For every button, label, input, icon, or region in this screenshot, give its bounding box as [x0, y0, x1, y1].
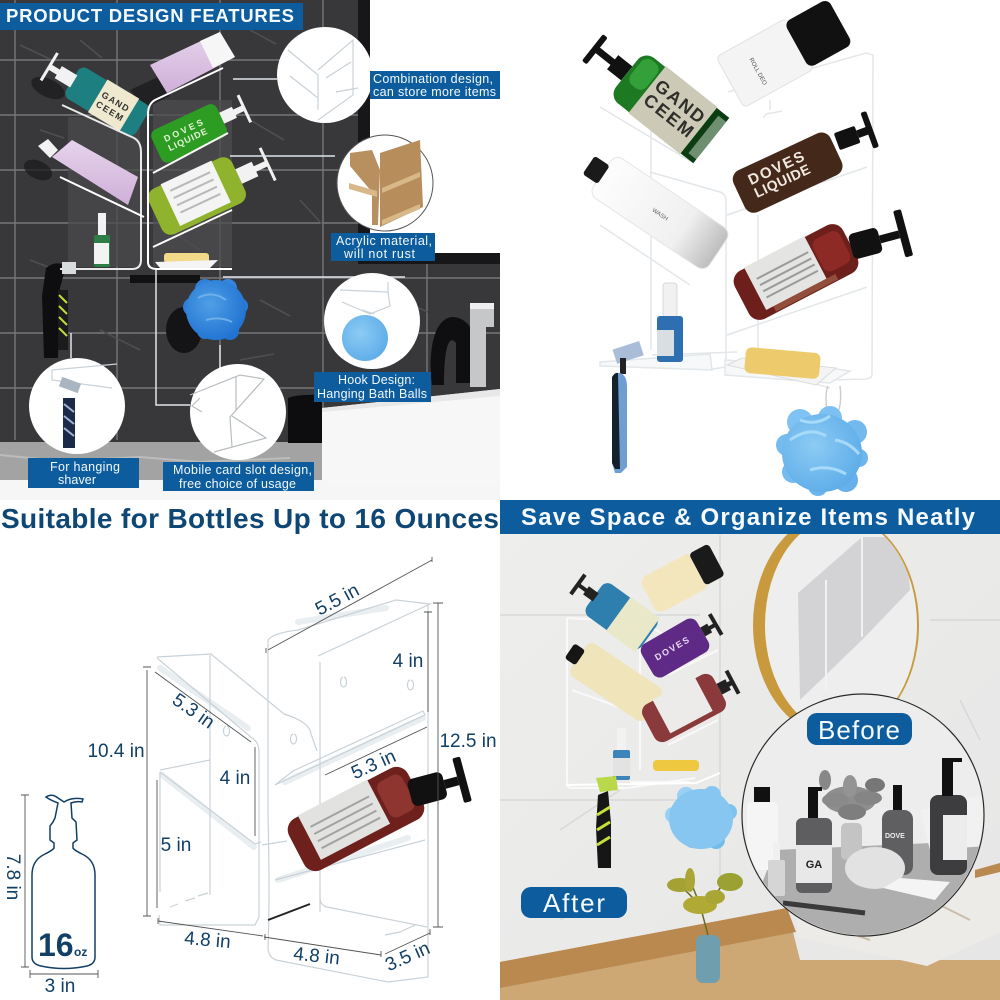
- bottle: teal soap: CEEM: [94, 99, 125, 123]
- bottle: white lower left: WASH: [651, 208, 669, 223]
- bottle: cream lower: [566, 643, 662, 721]
- header banner: Save Space & Organize Items Neatly: [521, 504, 976, 531]
- dimension labels: 5.5 in: [312, 580, 363, 620]
- callout circle: wood model: [337, 135, 433, 231]
- bottle on rack: [283, 761, 429, 876]
- dimension lines: [21, 557, 443, 978]
- white backdrop: [0, 500, 500, 1000]
- dove bottle: [882, 810, 913, 875]
- dimension labels: 10.4 in: [87, 741, 145, 762]
- label: for hanging shaver: For hanging: [50, 460, 120, 474]
- bottle: green soap: [151, 94, 252, 163]
- leader lines: [71, 79, 405, 405]
- label: for hanging shaver: shaver: [58, 473, 96, 487]
- small bottle, soap: [566, 728, 720, 785]
- callout circle: card slot: [190, 364, 286, 460]
- bottle: red la bruket: [729, 219, 863, 324]
- tiled dark wall: [0, 0, 500, 442]
- soap and dish: [155, 253, 218, 268]
- bottle: brown doves liquide: LIQUIDE: [751, 161, 813, 201]
- bottle: lilac upper: [150, 32, 235, 93]
- table top: [740, 840, 1000, 940]
- label: hook design: Hook Design:: [338, 373, 415, 387]
- bottle: red and white: [642, 670, 740, 742]
- acrylic rack outline: [157, 600, 430, 982]
- header banner: PRODUCT DESIGN FEATURES: [6, 5, 294, 26]
- bottle: lilac lower: [38, 139, 138, 205]
- bottle: teal soap: GAND: [100, 90, 131, 114]
- dimension labels: 4.8 in: [183, 928, 232, 953]
- acrylic frame: [600, 53, 873, 388]
- bottle: green gand ceem: GAND: [651, 76, 709, 127]
- bottle: white with black cap: ROLL DEO: [747, 57, 767, 87]
- panel: product on white: [500, 0, 1000, 500]
- dark bottle: [930, 795, 967, 875]
- bath pouf: [665, 786, 737, 849]
- label: mobile card slot: Mobile card slot design,: [173, 463, 312, 477]
- soap on dish: [727, 347, 836, 385]
- label: combination design: can store more items: [373, 85, 496, 99]
- callout circle: hook and pouf: [324, 273, 420, 369]
- label: combination design: [370, 71, 500, 99]
- dimension labels: 4 in: [220, 768, 250, 789]
- acrylic rack frame: [60, 68, 232, 269]
- bath pouf: [183, 279, 248, 340]
- razor: [58, 262, 76, 350]
- callout circle: combination design: [277, 27, 373, 123]
- bottle: teal: [569, 574, 660, 652]
- pump bottle with label: [796, 818, 832, 893]
- counter and sink: [0, 303, 500, 500]
- razor: [783, 903, 865, 913]
- dimension labels: [2, 580, 497, 997]
- dimension labels: 4.8 in: [292, 944, 341, 969]
- panel: before and after: [500, 500, 1000, 1000]
- mirror: [753, 534, 919, 718]
- bottle: green gand ceem: [574, 23, 730, 164]
- panel: dimensions: [0, 500, 500, 1000]
- label: hook design: [314, 372, 431, 402]
- small blue bottle: [657, 283, 683, 362]
- dimension labels: 3.5 in: [382, 938, 433, 976]
- label: acrylic material: Acrylic material,: [336, 234, 432, 248]
- dish: [883, 878, 950, 900]
- before circle scene: GA: [806, 859, 822, 871]
- vase and plant: [667, 868, 743, 983]
- dimension labels: 5.3 in: [348, 746, 399, 784]
- label: after: After: [543, 888, 605, 918]
- dimension labels: 5 in: [161, 835, 191, 856]
- bottle: purple: DOVES: [653, 635, 691, 662]
- pump on rack bottle: [404, 757, 472, 816]
- label: for hanging shaver: [28, 458, 139, 488]
- acrylic panels and shadows: [21, 72, 232, 358]
- 16oz bottle outline: [32, 795, 95, 968]
- bottle: olive soap: [149, 147, 277, 235]
- pump: red bottle: [845, 209, 913, 270]
- dimension labels: 5.3 in: [168, 690, 218, 733]
- bottle: brown doves liquide: DOVES: [746, 148, 807, 189]
- skirting and counter: [500, 863, 1000, 1000]
- plant and vase: [824, 786, 876, 814]
- hook wire: [826, 386, 841, 416]
- title: Suitable for Bottles Up to 16 Ounces: [1, 503, 499, 534]
- wall: [500, 534, 1000, 962]
- dimension labels: 3 in: [45, 976, 75, 997]
- bottle: green gand ceem: CEEM: [640, 90, 697, 141]
- label: combination design: Combination design,: [373, 72, 493, 86]
- label: after: [521, 887, 627, 918]
- small pump bottle: [768, 860, 785, 896]
- acrylic rack: [566, 617, 718, 789]
- bottle: green soap: DOVES: [162, 117, 205, 144]
- 16oz bottle outline: oz: [74, 945, 87, 959]
- bottle: green soap: LIQUIDE: [166, 126, 209, 153]
- pump: brown bottle: [830, 111, 879, 160]
- dimension labels: 7.8 in: [2, 854, 23, 900]
- label: mobile card slot: free choice of usage: [179, 477, 296, 491]
- mirror: [358, 0, 500, 264]
- before circle scene: DOVE: [885, 833, 905, 840]
- puff: [845, 847, 905, 889]
- bottle: brown doves liquide: [729, 129, 846, 216]
- 16oz bottle outline: 16: [38, 927, 74, 963]
- dimension labels: 4 in: [393, 651, 423, 672]
- panel: product design features: [0, 0, 500, 500]
- bottle: purple: [640, 613, 724, 678]
- label: acrylic material: [331, 233, 435, 261]
- razor: [612, 341, 644, 473]
- bottle: white with black cap: [716, 0, 854, 108]
- dimension labels: 12.5 in: [439, 731, 497, 752]
- razor: [596, 776, 618, 868]
- label: before: Before: [818, 715, 900, 745]
- before circle scene: [740, 694, 1000, 940]
- bottle: white lower left: [575, 145, 731, 272]
- label: acrylic material: will not rust: [343, 247, 416, 261]
- white backdrop: [500, 0, 1000, 500]
- label: hook design: Hanging Bath Balls: [317, 387, 427, 401]
- bottle: cream top: [642, 544, 724, 612]
- label: mobile card slot: [163, 462, 314, 491]
- bottle: teal soap: [40, 52, 148, 136]
- bath pouf: [776, 406, 868, 496]
- small serum bottle: [94, 213, 110, 267]
- white bottle: [747, 802, 778, 870]
- callout circle: shaver: [29, 358, 125, 454]
